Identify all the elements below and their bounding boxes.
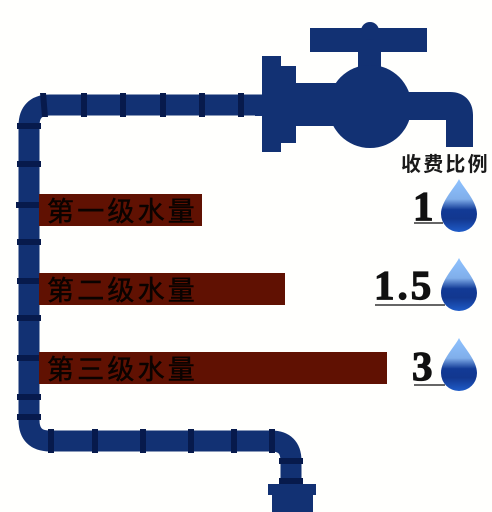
tier 3 bar: 第三级水量 — [47, 355, 198, 385]
tier 1 ratio — [413, 179, 477, 232]
pipe — [16, 93, 303, 486]
ratio heading: 收费比例 — [401, 153, 490, 176]
tier 1 bar: 第一级水量 — [47, 197, 198, 227]
faucet — [255, 22, 473, 152]
tier 2 ratio — [374, 258, 477, 311]
left pipe collars — [16, 123, 41, 420]
tier 3 ratio: 3 — [412, 343, 432, 389]
bottom pipe collars — [48, 429, 303, 484]
top pipe collars — [40, 93, 244, 117]
pipe outlet cap — [268, 484, 316, 512]
tier 2 bar: 第二级水量 — [47, 276, 198, 306]
tier 1 ratio: 1 — [413, 183, 434, 229]
tier 3 bar — [39, 352, 387, 385]
tier 3 ratio — [412, 338, 477, 391]
tier 2 ratio: 1.5 — [374, 262, 434, 308]
tier 2 bar — [39, 273, 285, 306]
